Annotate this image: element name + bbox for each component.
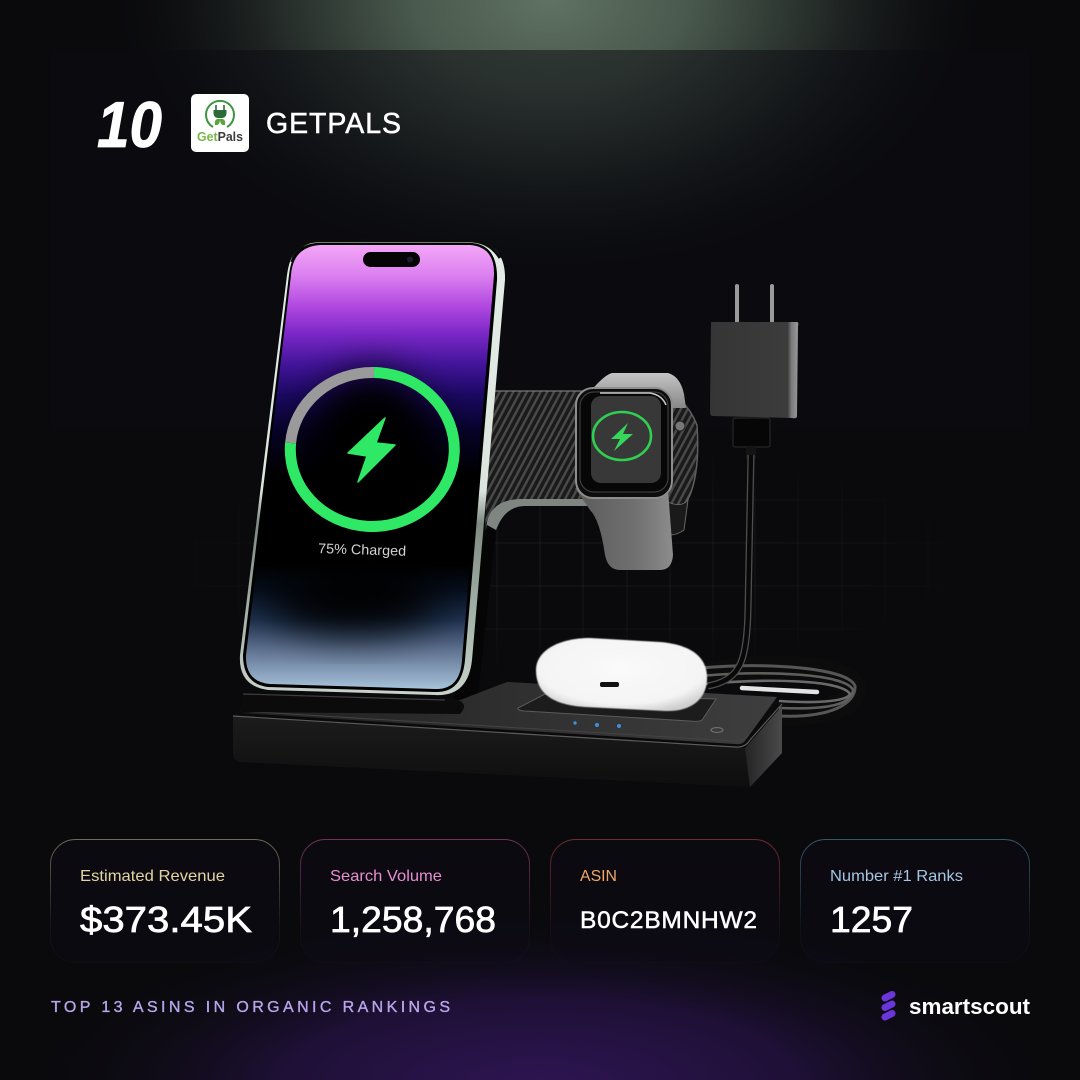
crown [675, 421, 685, 431]
upper strap [590, 373, 686, 408]
charge label: 75% Charged [318, 540, 406, 559]
charging bolt [348, 418, 395, 482]
screen center shade [270, 370, 442, 632]
arm connecting stand and watch charger [452, 391, 600, 715]
stat card: asin [550, 840, 780, 962]
watch bolt [611, 423, 633, 451]
smartwatch [575, 373, 698, 570]
watch band back [650, 385, 698, 520]
power adapter [708, 284, 798, 686]
phone bezel [243, 243, 497, 692]
adapter body [710, 322, 798, 418]
stand rear column [452, 525, 496, 715]
stat card: asin: ASIN [580, 868, 617, 885]
base top surface [240, 682, 777, 744]
lower strap [575, 488, 673, 570]
product: wireless charging station [233, 241, 855, 787]
base front and side [233, 706, 782, 787]
battery ring remaining [291, 372, 374, 443]
phone frame [240, 241, 505, 695]
cable coil [700, 666, 855, 716]
watch screen [591, 396, 661, 483]
stat card: asin: B0C2BMNHW2 [580, 907, 757, 934]
stat card: estimated revenue [50, 840, 280, 962]
logo wordmark: smartscout [909, 994, 1031, 1019]
usb plug [733, 418, 770, 447]
rank number: 10 [97, 88, 162, 161]
smartscout logo [885, 994, 1031, 1019]
stat card: number one ranks [800, 840, 1030, 962]
brand logo: GetPals [197, 130, 243, 144]
brand name: GETPALS [266, 108, 401, 140]
background grid [238, 490, 886, 640]
charging base [233, 682, 782, 787]
phone holder ledge [240, 693, 464, 714]
stat card: estimated revenue: $373.45K [80, 899, 252, 940]
stat card: number one ranks: 1257 [830, 899, 913, 940]
airpods case [536, 638, 707, 711]
cable [708, 455, 751, 686]
stat card: search volume: Search Volume [330, 868, 442, 885]
footer caption: TOP 13 ASINS IN ORGANIC RANKINGS [51, 999, 450, 1016]
dynamic island [363, 252, 420, 267]
brand logo [191, 94, 249, 152]
stat card: search volume: 1,258,768 [330, 899, 496, 940]
stat card: number one ranks: Number #1 Ranks [830, 868, 963, 885]
logo icon [885, 994, 892, 1017]
adapter prongs [735, 284, 774, 322]
stat card: search volume [300, 840, 530, 962]
watch charging ring [593, 412, 651, 460]
power button [711, 728, 723, 732]
charging pad inset [518, 694, 716, 721]
battery ring charged [290, 372, 454, 526]
smartphone [240, 241, 505, 695]
watch case [576, 388, 672, 498]
phone screen [246, 245, 494, 689]
stat card: estimated revenue: Estimated Revenue [80, 868, 225, 885]
status leds [573, 721, 621, 728]
